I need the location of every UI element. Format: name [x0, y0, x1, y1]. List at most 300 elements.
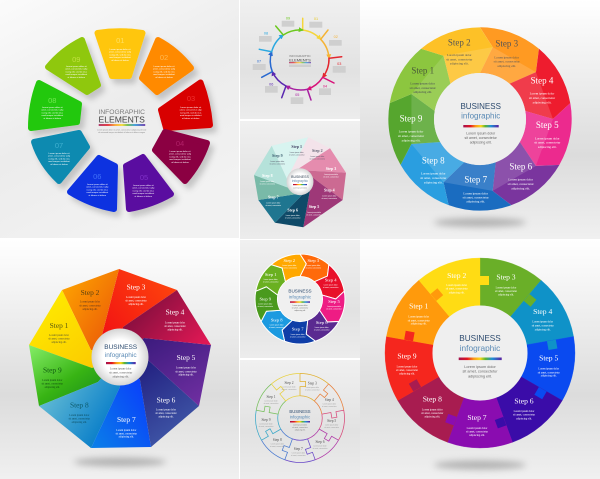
step body text: Lorem ipsum dolor [176, 367, 196, 370]
panel: arrow cycle with numbers [240, 0, 360, 119]
panel: small arrow ring with white gaps [240, 240, 360, 358]
step body text: sit amet, consectetur [446, 288, 468, 291]
step body text: Lorem ipsum dolor [282, 264, 297, 267]
step body text: sit amet, consectetur [532, 325, 554, 328]
center text: adipiscing elit. [470, 140, 492, 144]
petal body text: mod tempor incididunt [169, 158, 191, 161]
petal body text: iscing elit, sed do eius [42, 111, 64, 114]
petal body text: Lorem ipsum dolor sit [133, 184, 154, 187]
step labels: Step 7 [464, 175, 488, 185]
step numbers: 01 [314, 17, 318, 21]
step body text: Lorem ipsum dolor [156, 408, 176, 411]
petal numbers: 07 [55, 141, 63, 150]
step body text: adipiscing elit. [128, 303, 144, 306]
step body text: adipiscing elit. [516, 417, 532, 420]
step body text: sit amet, consectetur [290, 335, 306, 338]
step body text [398, 53, 561, 204]
step labels [43, 282, 196, 424]
step body text: Lorem ipsum dolor [260, 180, 275, 183]
center text: infographic [105, 352, 137, 359]
step body text: Lorem ipsum dolor [165, 321, 185, 324]
panel: infographic elements petals [0, 0, 239, 238]
step body text: Lorem ipsum dolor [446, 284, 467, 287]
petal body text: mod tempor incididunt [87, 191, 108, 194]
step labels: Step 5 [327, 419, 336, 423]
step body text: Lorem ipsum dolor [313, 446, 327, 448]
center text: adipiscing elit. [295, 428, 306, 432]
step body text: sit amet, consectetur [322, 405, 337, 408]
step body text: sit amet, consectetur [175, 370, 197, 373]
step body text: sit amet, consectetur [306, 266, 322, 269]
petal body text: ut labore et dolore [50, 163, 69, 166]
step numbers: 07 [257, 60, 261, 64]
step body text: sit amet, consectetur [322, 197, 338, 200]
petal body text: amet, consectetur adip [132, 187, 155, 190]
step labels: Step 4 [325, 398, 334, 402]
step labels: Step 6 [287, 208, 298, 212]
step labels: Step 1 [50, 321, 69, 330]
step numbers: 03 [337, 62, 341, 66]
step body text [260, 151, 339, 219]
step body text: Lorem ipsum dolor [307, 211, 321, 214]
step body text: sit amet, consectetur [266, 204, 282, 207]
step labels: Step 1 [409, 302, 428, 311]
center text: Lorem ipsum dolor [464, 365, 496, 369]
step labels: Step 4 [166, 307, 185, 316]
center text: sit amet, consectetur [292, 307, 309, 310]
petal body text: mod tempor incididunt [42, 114, 63, 117]
step labels: Step 4 [325, 278, 337, 282]
step body text: Lorem ipsum dolor [282, 386, 296, 388]
step numbers: 09 [286, 16, 290, 20]
petal body text: ut labore et dolore [134, 195, 153, 198]
step body text: Lorem ipsum dolor [259, 424, 273, 426]
step body text: Lorem ipsum dolor [266, 202, 281, 204]
center text: sit amet, consectetur [462, 370, 498, 374]
step body text: adipiscing elit. [82, 308, 98, 311]
step body text: sit amet, consectetur [116, 432, 137, 435]
step body text: Lorem ipsum dolor [327, 305, 341, 308]
step body text: sit amet, consectetur [258, 305, 274, 308]
step body text: adipiscing elit. [413, 90, 432, 94]
step body text: Lorem ipsum dolor [508, 178, 534, 182]
step numbers: 02 [334, 35, 338, 39]
step body text: Lorem ipsum dolor [258, 302, 273, 306]
step body text: adipiscing elit. [498, 294, 514, 297]
petal numbers: 02 [160, 53, 168, 62]
step labels: Step 3 [496, 273, 516, 282]
step body text: adipiscing elit. [402, 138, 421, 142]
step body text: Lorem ipsum dolor [270, 324, 284, 326]
step body text [258, 264, 342, 338]
step labels: Step 9 [259, 296, 272, 302]
step body text: Lorem ipsum dolor [292, 452, 305, 454]
step body text: adipiscing elit. [538, 145, 557, 149]
step labels: Step 3 [326, 166, 336, 171]
center text: infographic [460, 343, 500, 353]
petal body text: iscing elit, sed do eius [180, 111, 202, 114]
petal body text: amet, consectetur adip [180, 109, 203, 112]
center text: BUSINESS [291, 175, 310, 179]
center text [289, 409, 311, 432]
petal body text: amet, consectetur adip [65, 68, 88, 71]
step body text [396, 284, 560, 437]
petal numbers: 09 [72, 55, 80, 64]
panel: arrow ring business infographic [360, 0, 600, 239]
petal body text: mod tempor incididunt [153, 73, 175, 76]
step labels: Step 3 [495, 39, 519, 49]
step labels: Step 6 [509, 162, 533, 172]
step body text: sit amet, consectetur [421, 412, 443, 415]
step body text: Lorem ipsum dolor [291, 333, 305, 336]
center title: Lorem ipsum dolor sit amet, consectetur adipiscing elit sed [97, 128, 146, 132]
center text: sit amet, consectetur [292, 426, 308, 429]
step body text: Lorem ipsum dolor [323, 404, 336, 406]
center title [97, 109, 146, 134]
step labels: Step 8 [423, 395, 442, 404]
swirl wedges [29, 269, 211, 448]
step body text: Lorem ipsum dolor [494, 55, 520, 59]
step body text: Lorem ipsum dolor [514, 410, 534, 413]
step labels: Step 6 [157, 395, 176, 404]
center disc [434, 73, 526, 165]
ground shadow [74, 458, 166, 466]
step body text: Lorem ipsum dolor [538, 368, 559, 371]
petal numbers: 01 [116, 36, 124, 45]
step body text: sit amet, consectetur [420, 176, 447, 181]
step labels: Step 7 [117, 415, 136, 424]
step body text: sit amet, consectetur [79, 304, 101, 307]
step body text: Lorem ipsum dolor [271, 444, 284, 446]
step body text: sit amet, consectetur [410, 86, 437, 91]
step body text: sit amet, consectetur [270, 162, 286, 165]
step body text: Lorem ipsum dolor [399, 130, 424, 134]
center title: do eiusmod tempor incididunt ut labore et dolore magna [98, 131, 146, 134]
step labels: Step 1 [291, 144, 302, 149]
center disc [432, 306, 528, 400]
center text: infographic [461, 112, 500, 120]
step labels: Step 8 [70, 401, 89, 410]
step numbers: 05 [295, 93, 299, 97]
step body text: Lorem ipsum dolor [286, 214, 300, 217]
step labels: Step 9 [397, 352, 417, 361]
step body text: Lorem ipsum dolor [324, 173, 338, 176]
step body text: sit amet, consectetur [513, 414, 535, 417]
step body text: Lorem ipsum dolor [325, 424, 339, 426]
step body text: Lorem ipsum dolor [310, 155, 325, 158]
step labels: Step 6 [316, 320, 328, 325]
step body text: sit amet, consectetur [282, 388, 297, 391]
step labels: Step 5 [177, 353, 196, 362]
step body text: adipiscing elit. [72, 421, 87, 424]
step body text: sit amet, consectetur [291, 454, 306, 457]
swirl wedges [254, 137, 346, 227]
petal body text: ut labore et dolore [171, 161, 190, 164]
step body text: sit amet, consectetur [396, 369, 418, 372]
petal body text: amet, consectetur adip [48, 155, 71, 158]
petal body text: Lorem ipsum dolor sit [170, 150, 191, 153]
step body text: Lorem ipsum dolor [80, 301, 100, 304]
step body text: Lorem ipsum dolor [126, 296, 146, 299]
petal body text: amet, consectetur adip [41, 109, 64, 112]
step body text: Lorem ipsum dolor [530, 92, 555, 96]
petal body text: ut labore et dolore [67, 76, 86, 79]
center text [460, 102, 501, 144]
step labels: Step 2 [283, 258, 296, 263]
step body text [259, 386, 340, 457]
center text: sit amet, consectetur [109, 371, 132, 374]
petal body text: mod tempor incididunt [133, 192, 154, 195]
step body text: sit amet, consectetur [310, 157, 326, 160]
step body text: sit amet, consectetur [463, 195, 490, 200]
step numbers: 06 [269, 82, 273, 86]
petal body text: ut labore et dolore [88, 194, 107, 197]
center text: adipiscing elit. [112, 375, 129, 378]
panel: outlined puzzle ring [240, 360, 360, 479]
step body text: sit amet, consectetur [408, 319, 430, 322]
center text: Lorem ipsum dolor [466, 132, 496, 136]
step body text: sit amet, consectetur [269, 326, 285, 329]
center text: sit amet, consectetur [465, 136, 498, 140]
step labels: Step 7 [268, 194, 279, 200]
step labels: Step 1 [266, 395, 276, 399]
step body text: Lorem ipsum dolor [463, 191, 489, 195]
petal body text: iscing elit, sed do eius [48, 157, 71, 160]
puzzle outlines [247, 366, 350, 470]
step body text: Lorem ipsum dolor [408, 316, 429, 319]
center text: infographic [290, 414, 310, 420]
step labels [400, 38, 559, 185]
step labels: Step 4 [324, 188, 335, 192]
petal body text: iscing elit, sed do eius [153, 70, 176, 73]
step body text: sit amet, consectetur [314, 328, 330, 331]
step body text: Lorem ipsum dolor [116, 429, 136, 432]
step body text: Lorem ipsum dolor [264, 278, 278, 281]
step body text: Lorem ipsum dolor [322, 194, 337, 198]
step labels: Step 8 [273, 438, 282, 442]
petal body text: ut labore et dolore [155, 76, 174, 79]
step body text: sit amet, consectetur [259, 425, 274, 428]
center text [459, 334, 502, 378]
step body text: Lorem ipsum dolor [397, 365, 417, 368]
step labels: Step 8 [271, 318, 283, 322]
petal ring [31, 31, 210, 209]
step body text: sit amet, consectetur [69, 418, 90, 421]
center text: BUSINESS [459, 334, 501, 343]
step body text: Lorem ipsum dolor [306, 264, 321, 267]
step labels: Step 7 [294, 447, 303, 451]
petal body text: amet, consectetur adip [169, 153, 192, 156]
step body text: Lorem ipsum dolor [410, 82, 436, 86]
step body text: adipiscing elit. [424, 180, 443, 184]
center text: adipiscing elit. [468, 374, 492, 378]
petal body text: amet, consectetur adip [153, 68, 176, 71]
petal body text: Lorem ipsum dolor sit [42, 106, 63, 109]
step body text: sit amet, consectetur [164, 325, 186, 328]
step labels: Step 3 [307, 258, 320, 263]
step labels: Step 1 [265, 272, 277, 277]
step body text: sit amet, consectetur [264, 402, 279, 405]
center text: adipiscing elit. [294, 309, 306, 312]
petal body text: iscing elit, sed do eius [133, 189, 155, 192]
petal body text: Lorem ipsum dolor sit [66, 65, 87, 68]
step labels: Step 6 [514, 397, 534, 406]
step body text: adipiscing elit. [399, 372, 415, 375]
step body text: sit amet, consectetur [529, 96, 556, 101]
step body text: Lorem ipsum dolor [264, 400, 278, 402]
arrow wedges [371, 11, 584, 225]
step body text: sit amet, consectetur [324, 426, 340, 429]
step labels: Step 4 [533, 307, 552, 316]
center title: ELEMENTS [289, 57, 311, 62]
step body text: sit amet, consectetur [282, 266, 298, 269]
step labels: Step 2 [312, 148, 323, 153]
step body text: Lorem ipsum dolor [467, 427, 487, 430]
petal body text: ut labore et dolore [111, 59, 130, 62]
step body text: adipiscing elit. [51, 341, 67, 344]
step body text: adipiscing elit. [167, 328, 183, 331]
center title: ELEMENTS [99, 114, 145, 124]
ground shadow [434, 460, 526, 470]
step body text: sit amet, consectetur [508, 182, 535, 187]
step body text: adipiscing elit. [45, 386, 60, 389]
step body text: sit amet, consectetur [323, 175, 339, 178]
step body text: sit amet, consectetur [285, 216, 301, 219]
petal body text: Lorem ipsum dolor sit [110, 48, 131, 51]
petal body text: mod tempor incididunt [180, 114, 202, 117]
step body text: adipiscing elit. [541, 375, 557, 378]
ground shadow [434, 218, 526, 227]
center text: Lorem ipsum dolor [293, 186, 307, 190]
step body text: sit amet, consectetur [494, 60, 521, 65]
puzzle wedges [367, 241, 588, 463]
step body text: Lorem ipsum dolor [532, 321, 553, 324]
petal body text: Lorem ipsum dolor sit [154, 65, 175, 68]
step body text: Lorem ipsum dolor [421, 172, 447, 176]
step body text: sit amet, consectetur [125, 300, 147, 303]
step labels: Step 9 [272, 153, 283, 158]
step body text: sit amet, consectetur [538, 371, 560, 374]
center text [288, 288, 312, 312]
step labels: Step 8 [262, 173, 273, 178]
petal body text: Lorem ipsum dolor sit [87, 183, 108, 186]
step body text: sit amet, consectetur [270, 445, 285, 448]
step numbers: 08 [264, 32, 268, 36]
step labels [262, 144, 336, 212]
petal numbers: 06 [93, 172, 101, 181]
center text: Lorem ipsum dolor [110, 367, 132, 370]
step body text: sit amet, consectetur [155, 412, 177, 415]
step body text: adipiscing elit. [450, 61, 469, 65]
step body text: Lorem ipsum dolor [535, 136, 561, 140]
center text [291, 175, 310, 190]
petal numbers: 08 [48, 96, 56, 105]
step labels: Step 6 [315, 440, 325, 444]
step body text: Lorem ipsum dolor [447, 53, 473, 57]
grey text boxes [253, 21, 346, 104]
step labels: Step 2 [447, 271, 466, 280]
petal body text: amet, consectetur adip [109, 51, 132, 54]
step labels: Step 9 [261, 418, 271, 422]
center title: INFOGRAPHIC [98, 109, 145, 116]
step numbers: 04 [323, 84, 327, 88]
arrow ring [259, 18, 342, 100]
step body text: Lorem ipsum dolor [49, 334, 69, 337]
center text: infographic [289, 294, 312, 300]
step body text: adipiscing elit. [535, 328, 551, 331]
step body text: Lorem ipsum dolor [315, 326, 329, 329]
center text: BUSINESS [289, 409, 311, 414]
panel: rainbow swirl nonagon [0, 240, 239, 479]
petal body text: mod tempor incididunt [66, 73, 87, 76]
step body text: adipiscing elit. [469, 434, 485, 437]
step body text: Lorem ipsum dolor [496, 287, 516, 290]
step labels: Step 7 [292, 327, 304, 332]
center text: infographic [292, 179, 308, 183]
step body text: Lorem ipsum dolor [324, 284, 338, 286]
step body text: adipiscing elit. [119, 436, 134, 439]
petal body text: ut labore et dolore [43, 117, 62, 120]
step body text: sit amet, consectetur [305, 388, 320, 391]
step body text: adipiscing elit. [449, 291, 465, 294]
center text [104, 344, 138, 378]
step body text: Lorem ipsum dolor [69, 414, 89, 417]
step labels: Step 2 [448, 38, 471, 48]
step labels: Step 5 [328, 299, 341, 304]
step labels: Step 8 [422, 155, 445, 165]
step body text [42, 296, 197, 439]
step body text: Lorem ipsum dolor [42, 379, 62, 382]
step body text: sit amet, consectetur [42, 383, 63, 386]
step body text: sit amet, consectetur [306, 213, 322, 216]
petal body text: mod tempor incididunt [109, 56, 131, 59]
step body text: Lorem ipsum dolor [422, 408, 443, 411]
step body text: sit amet, consectetur [446, 57, 473, 62]
petal body text: mod tempor incididunt [48, 160, 70, 163]
step body text: sit amet, consectetur [534, 141, 561, 146]
step labels [259, 258, 341, 332]
step body text: adipiscing elit. [411, 323, 427, 326]
center disc [286, 168, 314, 195]
center disc [278, 277, 322, 321]
step labels: Step 1 [411, 66, 434, 76]
petal body text: ut labore et dolore [182, 117, 200, 120]
step body text: adipiscing elit. [158, 415, 174, 418]
step labels: Step 5 [309, 204, 319, 209]
step labels: Step 3 [308, 382, 317, 386]
petal body text: iscing elit, sed do eius [66, 70, 88, 73]
step labels: Step 3 [127, 282, 146, 291]
step body text: sit amet, consectetur [313, 447, 328, 450]
petal numbers: 04 [176, 139, 184, 148]
step body text: sit amet, consectetur [260, 182, 276, 185]
petal numbers: 03 [187, 94, 195, 103]
step body text: Lorem ipsum dolor [270, 160, 285, 163]
center text: Lorem ipsum dolor [293, 305, 308, 307]
center title: INFOGRAPHIC [289, 54, 312, 58]
arrow wedges [247, 246, 351, 351]
petal numbers: 05 [140, 173, 148, 182]
step body text: sit amet, consectetur [466, 431, 488, 434]
step labels: Step 9 [400, 114, 423, 124]
petal numbers [48, 36, 195, 182]
step labels: Step 5 [539, 354, 558, 363]
petal body text: iscing elit, sed do eius [109, 53, 132, 56]
petal body text: iscing elit, sed do eius [87, 188, 109, 191]
step body text: adipiscing elit. [424, 416, 441, 419]
step body text: adipiscing elit. [178, 374, 194, 377]
center title [289, 54, 312, 67]
